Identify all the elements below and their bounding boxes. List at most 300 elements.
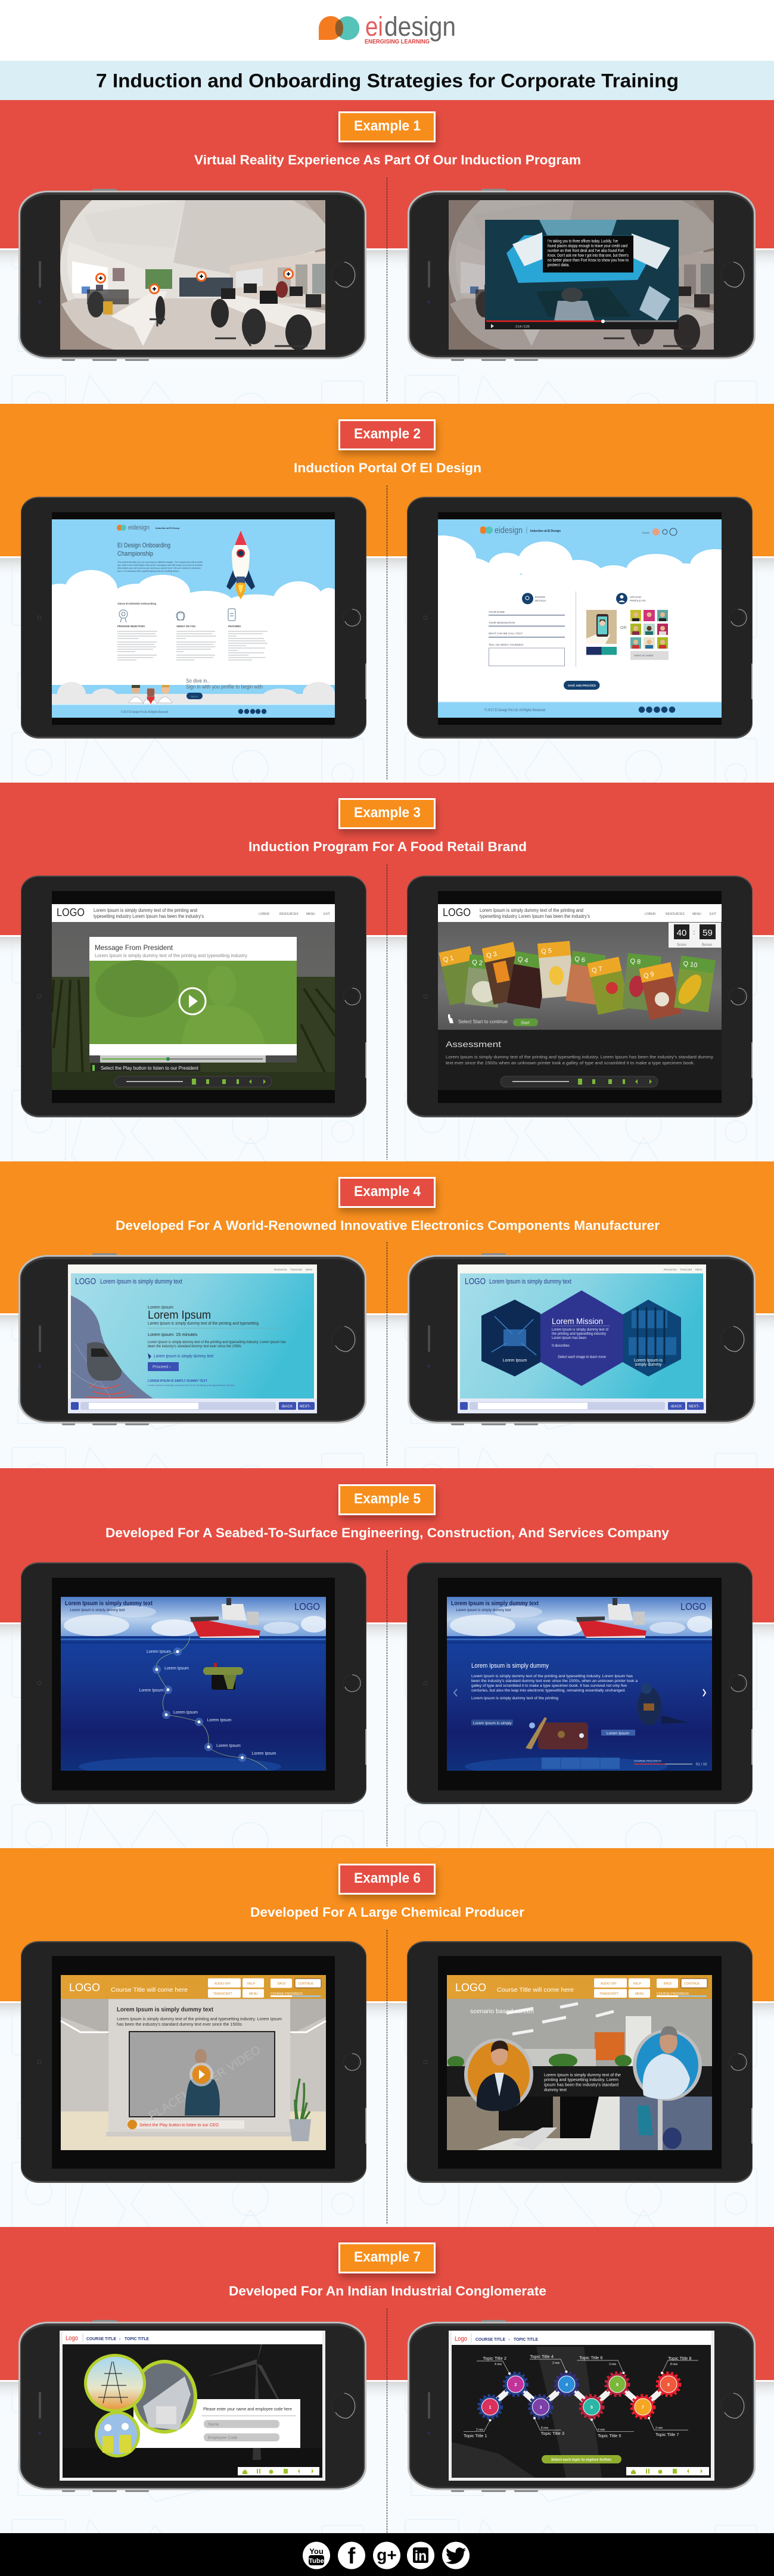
badge [340,1485,435,1514]
form: enter details: WHAT CAN WE CALL YOU? [489,632,523,635]
gears: 4 [565,2383,568,2387]
mission text: Lorem Ipsum has been [552,1337,586,1340]
score box [669,923,721,948]
portal heading: Championship [117,550,153,557]
mission text: the printing and typesetting industry [552,1332,606,1336]
topic labels: Topic Title 8 [668,2356,692,2361]
topic labels: 2 min [476,2428,483,2432]
toolbar and progress [542,1758,707,1769]
badge: Example 2 [354,426,421,442]
subtitle: Induction Program For A Food Retail Brand [248,839,527,854]
course header [61,1975,326,1999]
panel: example 4 [0,1161,774,1468]
badge: Example 4 [354,1183,421,1200]
start prompt [448,1014,538,1026]
player bar [68,1398,317,1413]
mission text: Lorem Mission [552,1316,603,1326]
play hint: Select the Play button to listen to our President [101,1066,199,1071]
course header: CONTINUE [684,1982,700,1986]
topic labels [464,2354,698,2438]
about columns [117,602,268,660]
phone: employee login [18,2320,366,2492]
badge [340,1864,435,1894]
video caption: Knox. Don't ask me how I got into that one, but there's [548,254,629,258]
video caption: found places sloppy enough to leave your credit card [548,244,627,248]
course header: LOGO [57,907,85,918]
form: enter details: ENTER [535,596,546,599]
room [61,1999,326,2150]
form: enter details: YOUR DESIGNATION [489,621,515,624]
question cards: Q 2 [472,959,483,967]
clouds [438,535,722,702]
course header: COURSE PROGRESS [271,1992,303,1996]
course header: Lorem Ipsum is simply dummy text of the printing and [94,908,197,913]
icon: YouTube [303,2542,330,2569]
course intro text: Lorem Ipsum is simply dummy text of the printing and typesetting industry [148,1384,235,1387]
form: enter details: YOUR NAME [489,610,505,613]
course header [52,904,335,922]
course header: TRANSCRIPT [599,1992,618,1996]
instruction pill [542,2455,621,2463]
body text [471,1662,638,1700]
assessment text: Assessment [446,1039,501,1049]
video caption: protect data. [548,263,570,267]
right character [633,2026,702,2101]
phone: hexagon mission screen [408,1253,756,1425]
question cards: Q 1 [443,955,455,964]
badge: Example 7 [354,2249,421,2265]
course header: BACK [664,1982,672,1986]
phone: car course screen: Lorem Ipsum is simply dummy text [100,1278,182,1285]
login panel [133,2399,300,2448]
start prompt: Select Start to continue [458,1019,508,1024]
video [129,2032,275,2123]
path with waypoints [139,1637,276,1770]
video card: Lorem Ipsum is simply dummy text of the printing and typesetting industry [95,953,247,958]
video card [89,937,297,1063]
course header: TRANSCRIPT [213,1992,232,1996]
player bar: ‹BACK [281,1405,293,1409]
icon: Google Plus: g+ [377,2546,397,2564]
dialogue: dummy text [544,2087,567,2092]
mission text: simply dummy [635,1363,662,1367]
icon: LinkedIn [407,2542,434,2569]
gears: 2 [514,2383,517,2387]
topic labels: Topic Title 6 [579,2355,603,2360]
wind turbine [206,2334,291,2460]
footer clouds and sign-in [52,678,335,718]
question cards: Q 4 [517,956,529,964]
gears: 7 [642,2406,644,2410]
badge [340,420,435,449]
field background [52,922,335,1090]
topic labels: 8 min [541,2427,548,2430]
icon: Facebook [338,2542,365,2569]
course header [438,904,722,922]
phone: hexagon mission screen: LOGO [465,1276,486,1287]
phone: car course screen: Resources [274,1268,287,1271]
about columns: ABOUT ON YOU [176,625,195,628]
road and car [71,1295,153,1398]
gears: 6 [616,2383,618,2387]
course header: CONTINUE [298,1982,314,1986]
form: upload profile picture: UPLOAD [630,596,642,599]
connectors [490,2384,669,2407]
course header: LOGO [443,907,471,918]
question cards: Q 10 [683,960,698,969]
icon: rocket [226,531,255,599]
course header: Course Title will come here [497,1986,574,1993]
tablet: ocean content screen [407,1562,753,1804]
assessment text: text ever since the 1500s when an unknown printer took a galley of type and scrambled it to make a type specimen book. [446,1060,695,1066]
course header [452,2331,711,2345]
icon: eidesign overlapping shapes [319,16,359,40]
tablet: portal profile form [407,497,753,739]
dialogue: Lorem Ipsum is simply dummy text of the [544,2072,621,2077]
subtitle: Developed For An Indian Industrial Conglomerate [229,2284,546,2298]
question cards: Q 6 [574,955,586,964]
tablet: scenario screen [407,1941,753,2183]
tablet: ocean journey map [21,1562,366,1804]
about columns: About EI DESIGN Onboarding [117,602,156,605]
course header: Logo [455,2335,467,2343]
portal heading: EI Design Onboarding [117,542,170,549]
badge: Example 5 [354,1491,421,1507]
portal heading [117,524,203,572]
form: enter details [489,593,565,666]
course header [447,1975,712,1999]
video caption: number on their front desk and I've also found Fort [548,249,624,253]
course header: TOPIC TITLE [125,2336,149,2341]
phone: car course screen: Menu [306,1268,313,1271]
panel: example 5 [0,1468,774,1848]
topic labels: 2 min [552,2362,559,2365]
course header: RESOURCES [279,912,299,916]
dialogue: Ipsum has been the industry's standard [544,2082,618,2087]
course header: MENU [306,912,315,916]
course header: AUDIO OFF [601,1982,617,1986]
panel: example 7 [0,2227,774,2533]
footer [438,702,722,718]
tablet: message from president [21,876,366,1117]
path with waypoints: Lorem Ipsum [164,1667,189,1671]
portal header: eidesign [495,525,523,535]
tablet: portal home [21,497,366,739]
mission text: Lorem Ipsum [503,1359,527,1363]
topic labels: Topic Title 7 [655,2432,679,2437]
topic labels: Topic Title 2 [483,2356,506,2361]
question cards [439,941,716,1020]
phone: VR video overlay [408,166,756,368]
tablet: CEO video room [21,1941,366,2183]
form: upload profile picture: OR [620,626,627,630]
phone: car course screen: Transcript [290,1268,303,1271]
plant [289,2079,311,2141]
topic labels: 3 min [609,2363,616,2366]
video controls: 2:14 / 3:25 [515,325,530,329]
player controls [501,1076,658,1087]
phone: car course screen [18,1253,366,1425]
topic labels: Topic Title 3 [541,2431,564,2436]
video caption: no better place than Fort Knox to show you how to [548,258,629,263]
badge [340,799,435,828]
gears: 1 [489,2406,492,2410]
course header: RESOURCES [666,912,685,916]
video caption: I'm taking you to three offices today. Luckily, I've [548,239,618,244]
path with waypoints: Lorem Ipsum [216,1744,241,1748]
course header: Course Title will come here [111,1986,188,1993]
score box: 59 [702,928,713,938]
wordmark: design [384,11,456,42]
characters [129,685,172,704]
hotspot labels [471,1720,635,1736]
video card: Message From President [95,943,173,952]
left character [464,2038,533,2111]
gears: 5 [590,2406,593,2410]
video panel [485,220,679,329]
icon: play [189,2063,213,2086]
room copy [117,2007,282,2027]
icon: Google Plus [373,2542,400,2569]
save button [564,681,599,690]
score box: Bonus [702,943,712,947]
mission text [503,1316,663,1367]
course intro text: Lorem Ipsum [148,1306,173,1310]
phone: hexagon mission screen: Transcript [680,1268,692,1271]
body text: Lorem Ipsum is simply dummy text of the printing and typesetting industry. Lorem Ipsum has [471,1674,633,1678]
topic labels: Topic Title 1 [464,2433,487,2438]
hotspot labels: Lorem Ipsum [607,1731,629,1736]
course header: Logo [66,2335,78,2342]
mission text: Select each image to learn more [558,1356,607,1359]
course intro text: Lorem Ipsum is simply dummy text of the printing and typesetting industry. Lorem Ipsum has [148,1341,286,1344]
course intro text: Lorem Ipsum is simply dummy text of the printing and typesetting [148,1322,259,1326]
tagline: ENERGISING LEARNING [365,38,430,45]
course header: MENU [635,1992,644,1996]
topic labels: Topic Title 5 [598,2433,621,2438]
video controls [485,319,679,329]
diver [638,1683,688,1725]
instruction pill: Select each topic to explore further. [551,2457,612,2462]
panel: example 3 [0,783,774,1161]
course header: MENU [249,1992,258,1996]
portal header: Induction at EI Design [530,529,561,533]
video: PLACEHOLDER VIDEO [147,2044,263,2123]
course header: COURSE TITLE [475,2337,505,2342]
course header: TOPIC TITLE [514,2337,538,2342]
icon: LinkedIn: in [415,2548,427,2563]
icon: Facebook: f [348,2544,356,2569]
gears: 8 [667,2383,670,2387]
path with waypoints: Lorem Ipsum [147,1650,171,1654]
badge: Example 1 [354,118,421,134]
player controls [114,1076,272,1087]
portal header [480,525,677,535]
course header: LOREM [259,912,269,916]
course header: AUDIO OFF [215,1982,231,1986]
avatar grid [630,610,668,649]
icon: YouTube: Tube [309,2558,324,2565]
player bar: NEXT› [689,1405,700,1409]
play hint: Select the Play button to listen to our CEO [139,2123,219,2128]
panel: example 1 [0,100,774,404]
course intro text: LOREM IPSUM IS SIMPLY DUMMY TEXT [148,1379,207,1383]
question cards: Q 3 [486,951,498,960]
topic labels: 8 min [670,2363,677,2366]
mission text: Lorem Ipsum is [634,1359,663,1363]
course header: COURSE TITLE [86,2336,116,2341]
assessment text [446,1039,713,1066]
scenario caption: scenario based screen [470,2008,534,2015]
phone: hexagon mission screen: Resources [664,1268,677,1271]
subtitle: Developed For A World-Renowned Innovative Electronics Components Manufacturer [116,1218,660,1233]
tablet: food assessment [407,876,753,1117]
course intro text: been the industry's standard dummy text ever since the 1500s [148,1345,241,1348]
icon: YouTube: You [309,2547,324,2556]
subtitle: Virtual Reality Experience As Part Of Our Induction Program [194,152,581,167]
dialogue: printing and typesetting industry. Lorem [544,2077,618,2082]
path with waypoints: Lorem Ipsum [252,1752,276,1756]
about columns: FEATURES [228,625,241,628]
course intro text: Lorem Ipsum [148,1309,211,1322]
topic labels: 4 min [598,2428,605,2432]
player bar: ‹BACK [670,1405,682,1409]
hexagons [481,1290,681,1386]
portal heading: information you will need as you start your career here. We are excited to welcome [117,566,201,569]
tablet: ocean content screen: LOGO [680,1601,706,1612]
office scene [447,1999,712,2150]
portal heading: Induction at EI Group [156,527,180,529]
course header: BACK [278,1982,286,1986]
subtitle: Developed For A Seabed-To-Surface Engineering, Construction, And Services Company [105,1525,670,1540]
course header: LOGO [69,1982,100,1993]
course header: HELP [633,1982,642,1986]
wordmark: ei [365,11,383,42]
score box: : [693,929,695,936]
question cards: Q 7 [591,965,603,974]
path with waypoints: Lorem Ipsum [173,1711,198,1715]
form: enter details: TELL US ABOUT YOURSELF [489,643,524,646]
gears: 3 [540,2406,542,2410]
topic labels: 2 min [655,2427,663,2430]
portal heading: The portal will take you on a journey to different stages. The experience will provide [117,560,203,563]
portal heading: you with more information about the company and will teach you how to access [117,563,203,566]
badge [340,2243,435,2273]
subtitle: Developed For A Large Chemical Producer [250,1905,524,1920]
topic labels: 4 min [495,2363,502,2366]
play hint [128,2120,244,2129]
footer clouds and sign-in: Sign in [191,694,198,698]
score box: Score [677,943,686,947]
body text: been the industry's standard dummy text ever since the 1500s, when an unknown printer took a [471,1679,638,1683]
course header: MENU [692,912,701,916]
course intro text [148,1306,286,1387]
title: 7 Induction and Onboarding Strategies for Corporate Training [96,70,679,92]
course header: typesetting industry Lorem Ipsum has been the industry's [94,914,204,919]
portal heading: you to a company with a great legacy and an exciting future [117,569,179,572]
body text: Lorem Ipsum is simply dummy [471,1662,549,1669]
about columns: PROGRAM OBJECTIVES [117,625,145,628]
clouds [42,570,342,685]
play hint [91,1063,200,1071]
badge [340,1178,435,1207]
video caption [548,239,629,267]
body text: centuries, but also the leap into electronic typesetting, remaining essentially unchanged. [471,1689,626,1693]
course header: COURSE PROGRESS [657,1992,689,1996]
question cards: Q 5 [541,948,552,955]
course intro text: Lorem Ipsum is simply dummy text [154,1354,214,1359]
body text: galley of type and scrambled it to make a type specimen book. It has survived not only five [471,1684,627,1688]
path with waypoints: Lorem Ipsum [139,1689,164,1693]
room copy: Lorem Ipsum is simply dummy text of the printing and typesetting industry. Lorem Ipsum [117,2017,282,2021]
course header: › [119,2337,121,2341]
tablet: ocean journey map: Lorem Ipsum is simply dummy text [65,1600,153,1607]
form: enter details: not more than 75 words [535,662,561,665]
footer: © 2017 EI Design Pvt Ltd. All Rights Reserved [484,708,545,712]
subtitle: Induction Portal Of EI Design [294,460,481,475]
path with waypoints: Lorem Ipsum [207,1718,232,1722]
footer clouds and sign-in: © 2017 EI Design Pvt Ltd. All Rights Reserved [121,710,168,714]
hotspot labels: Lorem Ipsum is simply [473,1721,512,1725]
panel: example 6 [0,1848,774,2227]
course header: › [508,2338,510,2342]
dialogue [544,2072,621,2092]
badge: Example 3 [354,805,421,821]
course header [63,2331,322,2344]
phone: VR office view [18,166,366,368]
login panel: Employee Code [208,2436,238,2440]
title band [0,61,774,100]
phone: car course screen: LOGO [75,1276,96,1287]
phone: hexagon mission screen: Menu [695,1268,702,1271]
course header: LOREM [645,912,655,916]
mission text: Lorem Ipsum is simply dummy text of [552,1328,608,1332]
phone: hexagon mission screen: Lorem Ipsum is simply dummy text [489,1278,571,1285]
course intro text: Proceed › [153,1365,171,1369]
topic labels: Topic Title 4 [530,2354,554,2359]
room copy: has been the industry's standard dummy text ever since the 1500s [117,2023,243,2027]
course header: LOGO [455,1982,486,1993]
course header: EXIT [710,912,716,916]
badge [340,112,435,142]
form: enter details: DETAILS [535,599,546,602]
ROV [203,1663,243,1690]
save button: SAVE AND PROCEED [568,684,596,687]
form: upload profile picture [586,593,669,660]
navigation arrows [454,1689,705,1696]
footer clouds and sign-in: So dive in.. [186,678,210,684]
toolbar [626,2467,709,2475]
footer clouds and sign-in: Sign in with you profile to begin with [186,684,263,690]
tablet: ocean content screen: Lorem Ipsum is simply dummy text [451,1600,539,1607]
tablet: ocean journey map: Lorem Ipsum is simply dummy text [70,1608,125,1612]
footer with social icons [0,2533,774,2576]
icon: play [179,988,206,1014]
form: upload profile picture: Select an avatar [634,654,654,657]
form: upload profile picture: PROFILE PIC [630,599,646,602]
login panel: Please enter your name and employee code here [203,2407,292,2412]
score box: 40 [677,928,686,938]
player bar: NEXT› [300,1405,310,1409]
portal header: David [642,531,649,534]
toolbar and progress: COURSE PROGRESS [634,1759,661,1762]
assessment text: Lorem Ipsum is simply dummy text of the printing and typesetting industry. Lorem Ipsum has been the industry's standard dummy [446,1054,713,1060]
icon: Twitter [442,2542,470,2569]
course header: Lorem Ipsum is simply dummy text of the printing and [480,908,583,913]
player bar [458,1398,706,1413]
login panel: Name [208,2423,219,2427]
treasure chest [526,1717,588,1749]
